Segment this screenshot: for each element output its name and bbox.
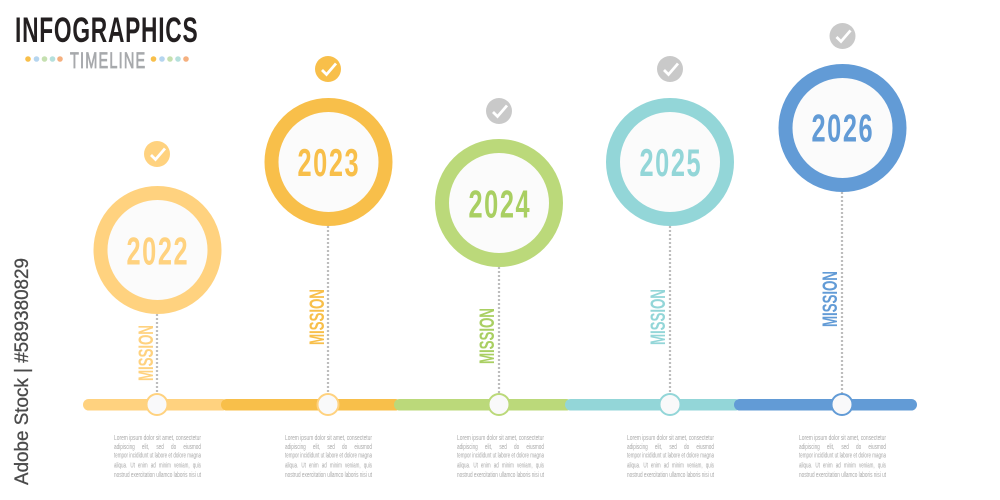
check badge 2022 xyxy=(144,141,170,167)
mission label 2026: MISSION xyxy=(818,271,842,327)
description 2024: Lorem ipsum dolor sit amet, consectetur xyxy=(457,433,544,442)
description 2025: tempor incididunt ut labore et dolore magna xyxy=(627,450,714,460)
description 2025: Lorem ipsum dolor sit amet, consectetur xyxy=(627,433,714,442)
description 2025: nostrud exercitation ullamco laboris nisi ut xyxy=(627,470,714,479)
description 2023: Lorem ipsum dolor sit amet, consectetur xyxy=(285,433,372,442)
node 2025 xyxy=(660,394,680,415)
description 2024: nostrud exercitation ullamco laboris nisi ut xyxy=(457,470,544,479)
check badge 2026 xyxy=(830,23,856,49)
description 2022: aliqua. Ut enim ad minim veniam, quis xyxy=(114,460,201,470)
year ring 2025: 2025 xyxy=(640,140,701,184)
description 2026: tempor incididunt ut labore et dolore magna xyxy=(799,450,886,460)
description 2025: aliqua. Ut enim ad minim veniam, quis xyxy=(627,460,714,470)
subtitle: timeline: TIMELINE xyxy=(70,48,145,73)
decorative dots left xyxy=(25,56,63,62)
description 2024: adipiscing elit, sed do eiusmod xyxy=(457,442,544,451)
milestone 2025 xyxy=(613,56,727,479)
description 2026: adipiscing elit, sed do eiusmod xyxy=(799,442,886,451)
check badge 2025 xyxy=(657,56,683,82)
mission label 2023: MISSION xyxy=(305,289,329,345)
year ring 2022: 2022 xyxy=(126,229,188,273)
year ring 2024: 2024 xyxy=(468,182,530,226)
connector lines xyxy=(157,192,842,394)
milestone 2022 xyxy=(100,141,214,479)
description 2024 xyxy=(457,433,544,479)
description 2023: adipiscing elit, sed do eiusmod xyxy=(285,442,372,451)
description 2023: aliqua. Ut enim ad minim veniam, quis xyxy=(285,460,372,470)
description 2026 xyxy=(799,433,886,479)
description 2026: aliqua. Ut enim ad minim veniam, quis xyxy=(799,460,886,470)
title block xyxy=(15,11,198,73)
description 2026: Lorem ipsum dolor sit amet, consectetur xyxy=(799,433,886,442)
year ring 2024 xyxy=(442,146,556,260)
description 2022: Lorem ipsum dolor sit amet, consectetur xyxy=(114,433,201,442)
milestone 2026 xyxy=(786,23,900,479)
check badge 2023 xyxy=(315,56,341,82)
decorative dots right xyxy=(151,56,189,62)
year ring 2025 xyxy=(613,105,727,219)
node 2023 xyxy=(318,394,338,415)
year ring 2022 xyxy=(100,193,214,307)
year ring 2026 xyxy=(786,71,900,185)
title: infographics: INFOGRAPHICS xyxy=(15,11,198,50)
description 2022: tempor incididunt ut labore et dolore magna xyxy=(114,450,201,460)
description 2025 xyxy=(627,433,714,479)
stock credit text: Adobe Stock | #589380829 xyxy=(11,258,33,485)
description 2023 xyxy=(285,433,372,479)
description 2022: nostrud exercitation ullamco laboris nisi ut xyxy=(114,470,201,479)
year ring 2023 xyxy=(272,105,386,219)
node 2022 xyxy=(146,394,168,415)
year ring 2026: 2026 xyxy=(812,106,873,150)
node 2026 xyxy=(832,394,852,415)
mission label 2024: MISSION xyxy=(475,308,499,364)
check badge 2024 xyxy=(486,98,512,124)
milestone 2024 xyxy=(442,98,556,479)
mission label 2025: MISSION xyxy=(646,289,670,345)
year ring 2023: 2023 xyxy=(298,140,359,184)
description 2022 xyxy=(114,433,201,479)
description 2025: adipiscing elit, sed do eiusmod xyxy=(627,442,714,451)
description 2026: nostrud exercitation ullamco laboris nisi ut xyxy=(799,470,886,479)
description 2024: tempor incididunt ut labore et dolore magna xyxy=(457,450,544,460)
description 2022: adipiscing elit, sed do eiusmod xyxy=(114,442,201,451)
description 2024: aliqua. Ut enim ad minim veniam, quis xyxy=(457,460,544,470)
mission label 2022: MISSION xyxy=(134,325,158,381)
node 2024 xyxy=(488,394,510,415)
description 2023: tempor incididunt ut labore et dolore magna xyxy=(285,450,372,460)
milestone 2023 xyxy=(272,56,386,479)
description 2023: nostrud exercitation ullamco laboris nisi ut xyxy=(285,470,372,479)
timeline bar xyxy=(83,399,917,410)
